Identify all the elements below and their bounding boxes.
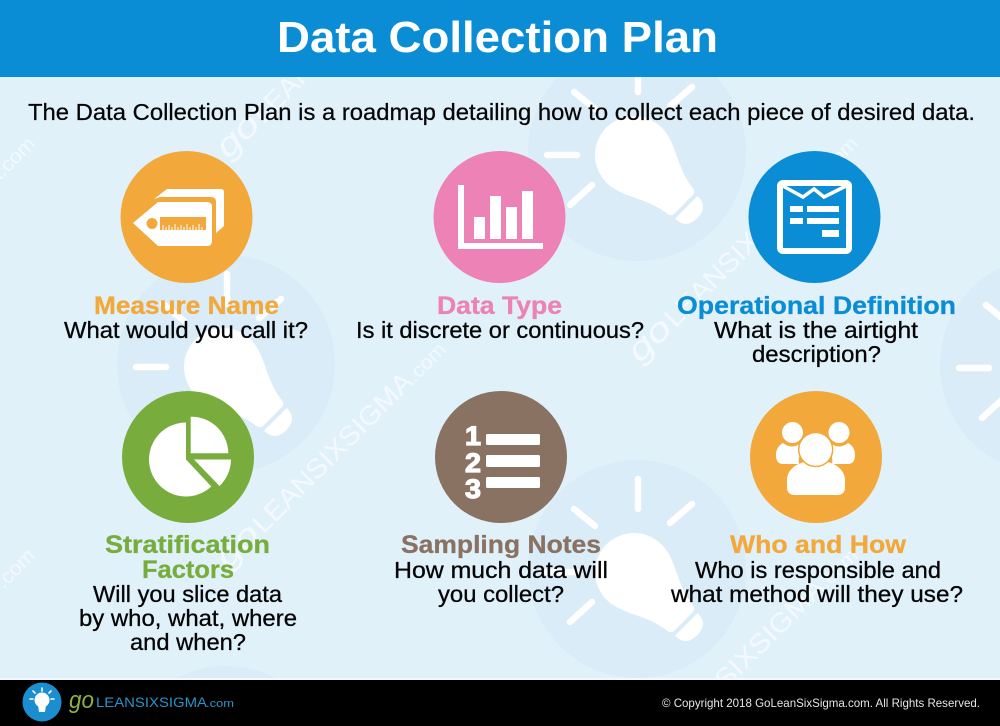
copyright: © Copyright 2018 GoLeanSixSigma.com. All Rights Reserved. (662, 696, 980, 710)
description: sampling notes: you collect? (438, 581, 564, 607)
panel: stratification factors (79, 391, 297, 655)
heading: stratification factors: Factors (142, 556, 234, 584)
description: data type: Is it discrete or continuous? (356, 317, 644, 343)
panel: data type (356, 151, 644, 343)
icon: pie chart (122, 391, 254, 523)
description: stratification factors: and when? (130, 629, 246, 655)
heading: operational definition: Operational Definition (677, 292, 956, 320)
description: stratification factors: by who, what, where (79, 605, 297, 631)
intro sentence: The Data Collection Plan is a roadmap detailing how to collect each piece of desired data. (28, 99, 975, 125)
header band (0, 0, 1000, 77)
panel: who and how (670, 391, 963, 607)
panel: operational definition (677, 151, 956, 367)
heading: measure name: Measure Name (94, 292, 279, 320)
description: who and how (670, 557, 963, 607)
description: operational definition (714, 317, 919, 367)
heading: stratification factors: Stratification (105, 531, 270, 559)
logo (22, 682, 234, 722)
description: who and how: what method will they use? (670, 581, 963, 607)
footer bar (0, 678, 1000, 726)
icon: measuring tag (120, 151, 252, 283)
description: sampling notes (394, 557, 608, 607)
panel: measure name (64, 151, 308, 343)
logo wordmark (69, 687, 234, 714)
icon: numbered list: 3 (465, 474, 481, 504)
watermarks: SIXSIGMA (709, 572, 831, 695)
logo wordmark: .com (206, 698, 234, 710)
watermarks: .com (815, 545, 863, 593)
description: operational definition: description? (752, 341, 881, 367)
heading: stratification factors (105, 531, 270, 584)
description: sampling notes: How much data will (394, 557, 608, 583)
icon: group of people (750, 391, 882, 523)
heading: sampling notes: Sampling Notes (401, 531, 601, 559)
description: stratification factors (79, 581, 297, 655)
description: measure name: What would you call it? (64, 317, 308, 343)
icon: document form (748, 151, 880, 283)
background lightbulbs (117, 43, 1000, 680)
title: Data Collection Plan (277, 13, 718, 62)
icon: numbered list: 2 (465, 448, 481, 478)
icon: bar chart (434, 151, 566, 283)
description: operational definition: What is the airtight (714, 317, 919, 343)
heading: data type: Data Type (437, 292, 562, 320)
logo wordmark: LEANSIXSIGMA (96, 695, 207, 710)
description: who and how: Who is responsible and (695, 557, 941, 583)
panel: sampling notes (394, 391, 608, 607)
icon: numbered list (435, 391, 567, 523)
icon: logo lightbulb (22, 682, 62, 722)
description: stratification factors: Will you slice data (93, 581, 282, 607)
icon: numbered list: 1 (465, 421, 481, 451)
heading: who and how: Who and How (730, 531, 907, 559)
logo wordmark: go (69, 687, 94, 714)
